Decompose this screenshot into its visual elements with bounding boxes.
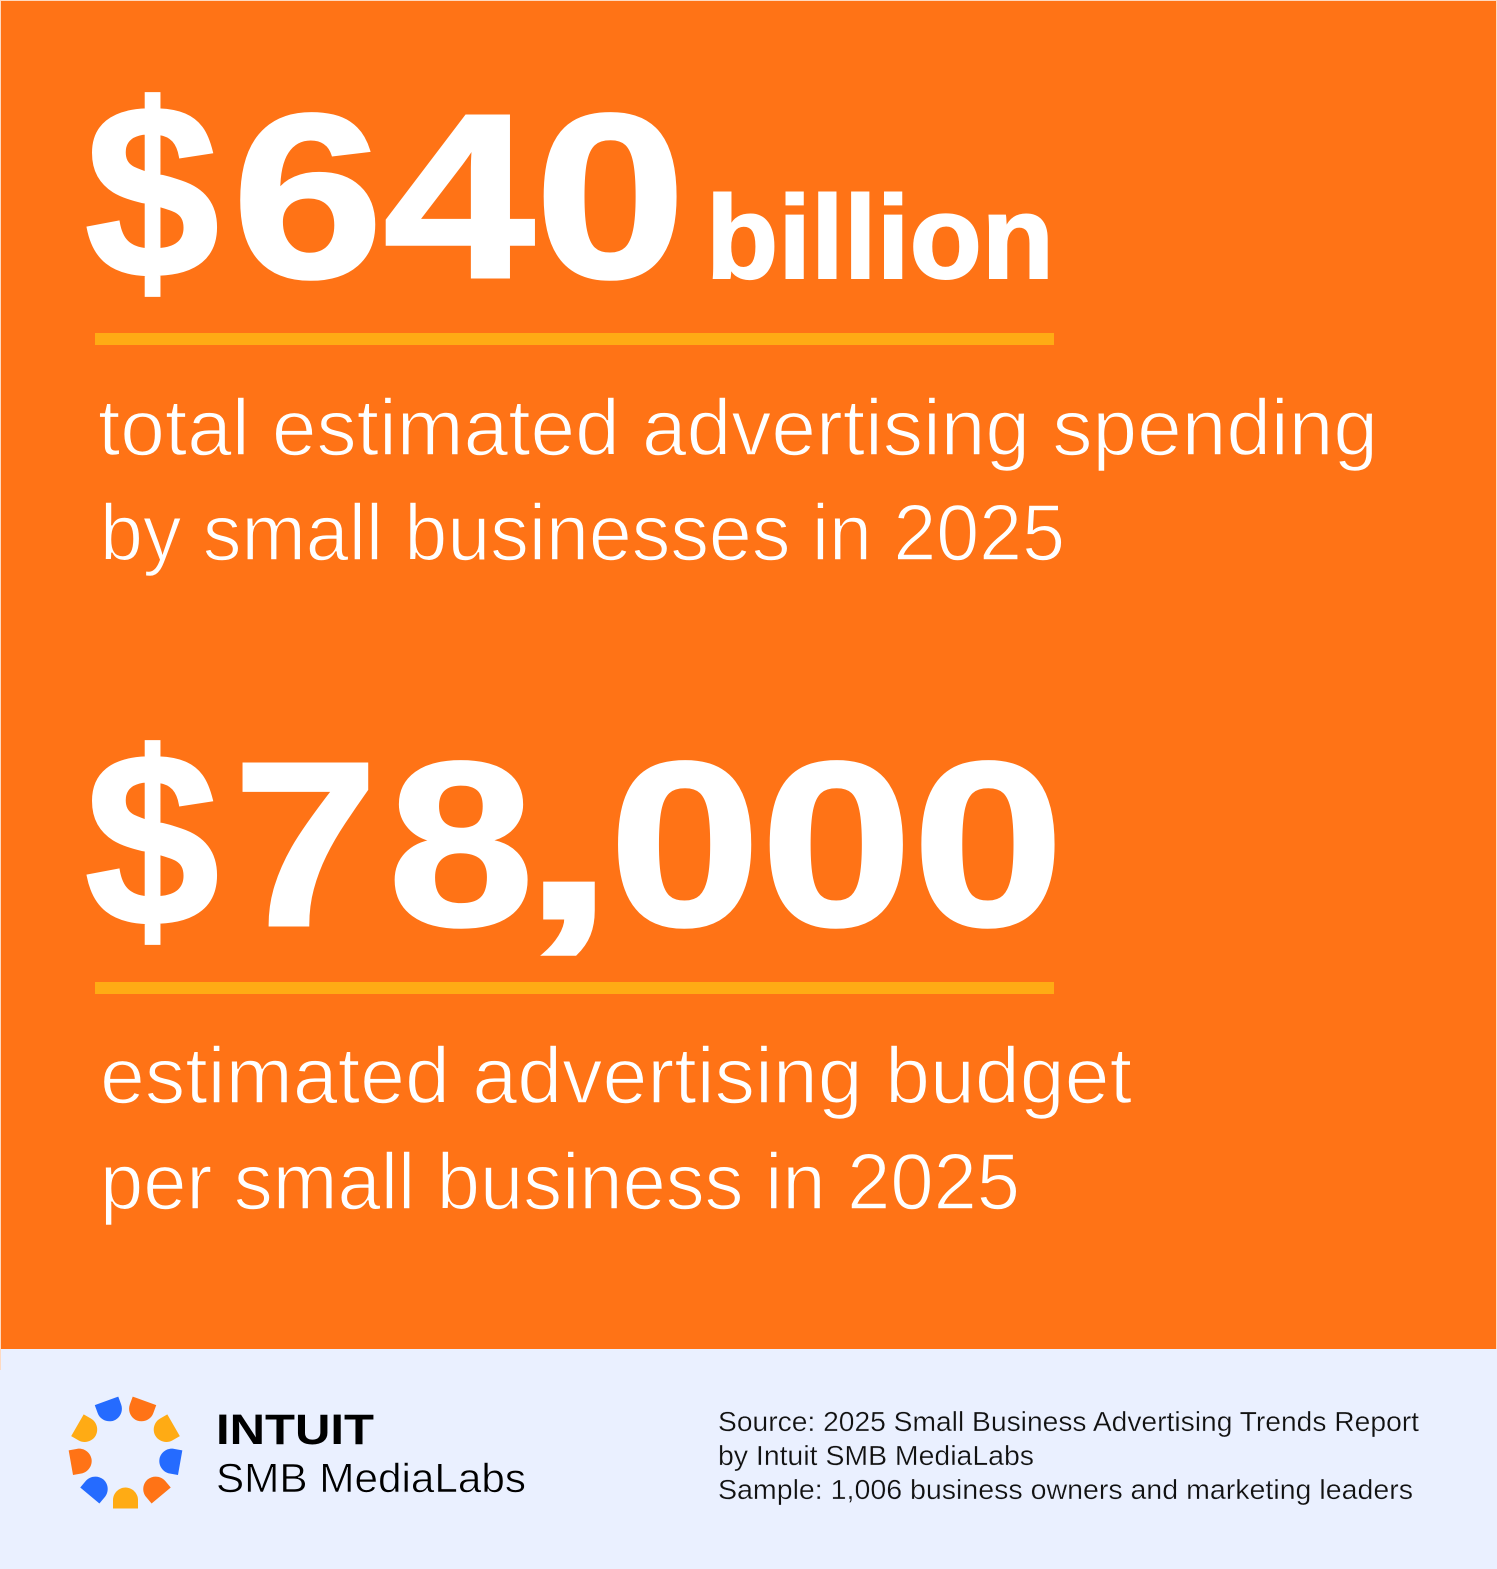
panel: footer bbox=[1, 1349, 1497, 1569]
divider: first stat underline bbox=[95, 333, 1054, 345]
stat: $78,000: $ bbox=[85, 702, 219, 978]
text: source and sample note bbox=[718, 1406, 1419, 1505]
text: source and sample note: by Intuit SMB MediaLabs bbox=[718, 1440, 1034, 1471]
logo wordmark: SMB MediaLabs: SMB MediaLabs bbox=[216, 1455, 526, 1501]
stat: $78,000 bbox=[85, 702, 1064, 978]
text: second stat description: per small business in 2025 bbox=[100, 1137, 1020, 1226]
divider: second stat underline bbox=[95, 982, 1054, 994]
stat: $640 billion: billion bbox=[706, 172, 1054, 304]
stat: $640 billion: $ bbox=[85, 54, 219, 330]
stat: $640 billion bbox=[85, 54, 1054, 330]
stat: $640 billion: 640 bbox=[232, 65, 686, 327]
text: source and sample note: Sample: 1,006 business owners and marketing leaders bbox=[718, 1474, 1413, 1505]
text: second stat description bbox=[100, 1031, 1132, 1226]
stat: $78,000: , bbox=[522, 706, 615, 968]
stat: $78,000: 000 bbox=[609, 713, 1064, 975]
text: first stat description bbox=[98, 383, 1378, 577]
stat: $78,000: 7 bbox=[233, 713, 378, 975]
stat: $78,000: 8 bbox=[388, 713, 534, 975]
text: second stat description: estimated advertising budget bbox=[100, 1031, 1132, 1120]
text: source and sample note: Source: 2025 Small Business Advertising Trends Report bbox=[718, 1406, 1419, 1437]
logo wordmark: Intuit: INTUIT bbox=[216, 1406, 374, 1454]
icon: Intuit SMB MediaLabs ring logo bbox=[69, 1397, 182, 1508]
text: first stat description: by small businesses in 2025 bbox=[100, 488, 1065, 577]
text: first stat description: total estimated advertising spending bbox=[98, 383, 1378, 472]
